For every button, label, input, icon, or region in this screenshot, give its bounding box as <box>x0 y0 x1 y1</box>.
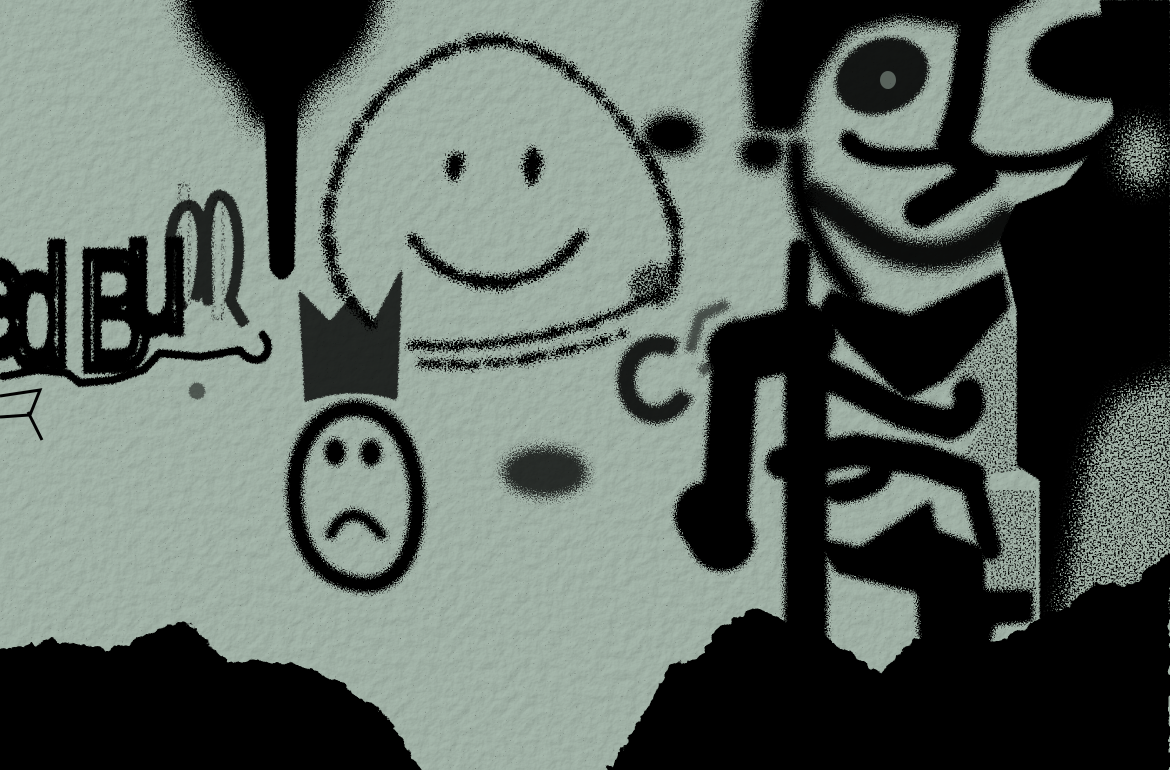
tag drip smudge <box>189 383 205 399</box>
short chest stroke <box>838 476 880 492</box>
large figure: lower band and right leg <box>813 490 1036 660</box>
letter C <box>626 344 686 415</box>
tag underline <box>0 333 268 383</box>
smiley face outline <box>328 40 679 365</box>
crown <box>299 268 402 402</box>
small scribble under tag <box>0 390 42 440</box>
grin <box>800 190 1015 256</box>
torn black edge bottom right <box>595 552 1170 770</box>
sad face mouth <box>329 515 384 538</box>
forearm <box>725 350 736 510</box>
speckled light patch lower right <box>1060 370 1170 625</box>
left eye <box>825 25 939 127</box>
right eye <box>1028 15 1170 100</box>
hand <box>708 515 722 538</box>
large figure: dark right side mass <box>1000 0 1170 650</box>
smiley right eye <box>522 149 542 186</box>
spray blot <box>644 115 700 155</box>
smiley mouth <box>413 236 581 283</box>
middle chest stroke <box>782 450 970 477</box>
sad face right eye <box>361 440 381 466</box>
large figure: hair <box>740 0 1045 171</box>
neutral spray smudge replacing the symbol in the reference <box>503 448 587 496</box>
upper arm <box>795 250 800 330</box>
stippled patch on torso right <box>945 300 1022 480</box>
torn black edge bottom left <box>0 620 432 770</box>
sad face left eye <box>325 439 345 465</box>
black paint drip at top <box>180 0 382 279</box>
smiley smudge right <box>631 263 679 307</box>
mustache <box>849 125 1118 164</box>
shoulder <box>738 335 806 352</box>
smiley left eye <box>446 152 464 182</box>
ear mark <box>740 135 784 171</box>
left eye highlight <box>880 71 896 89</box>
faint letters beside C <box>690 304 740 372</box>
speckled light patch top right <box>1119 123 1167 187</box>
sad face <box>294 408 417 585</box>
head outline <box>796 140 860 300</box>
torso line <box>785 335 827 640</box>
drip stem <box>264 90 298 279</box>
large figure: arm and torso strokes <box>708 250 990 640</box>
nose <box>920 25 982 212</box>
large figure: head lines <box>796 15 1170 300</box>
large figure: collar <box>817 270 1010 400</box>
faded patch on leg <box>990 490 1036 590</box>
upper chest stroke <box>815 368 970 425</box>
diagonal to leg <box>972 480 990 550</box>
tag loop letters <box>170 195 245 325</box>
